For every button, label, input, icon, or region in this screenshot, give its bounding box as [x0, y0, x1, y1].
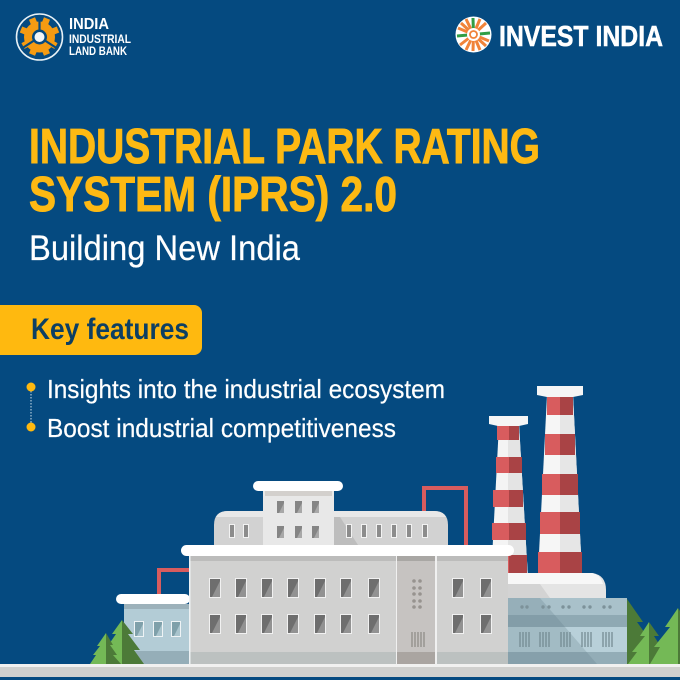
ground: [0, 664, 680, 677]
main building: [181, 545, 514, 664]
pipe: right: [424, 488, 466, 545]
pipe: left: [159, 570, 189, 594]
title: SYSTEM (IPRS) 2.0: [29, 168, 397, 222]
logo: India Industrial Land Bank: LAND BANK: [69, 44, 127, 58]
trees: right: [627, 599, 680, 664]
chimney: small: [489, 416, 528, 578]
subtitle: Building New India: [29, 229, 300, 268]
feature list: Insights into the industrial ecosystem: [47, 374, 445, 404]
title: INDUSTRIAL PARK RATING: [29, 120, 540, 174]
key features badge: [0, 305, 202, 355]
logo: India Industrial Land Bank: INDUSTRIAL: [69, 32, 131, 46]
logo: Invest India: [456, 16, 663, 53]
feature list: Boost industrial competitiveness: [47, 413, 396, 443]
title: [29, 120, 540, 222]
feature list: [26, 374, 445, 443]
right building: [508, 573, 627, 664]
chimney: large: [537, 386, 583, 573]
logo: India Industrial Land Bank: INDIA: [69, 16, 109, 33]
key features badge: Key features: [31, 313, 189, 346]
logo: India Industrial Land Bank: [16, 14, 131, 60]
windows: [209, 578, 492, 634]
left annex: [116, 594, 190, 664]
top tower: [253, 481, 343, 545]
trees: left: [90, 620, 144, 664]
back building: [214, 511, 448, 545]
